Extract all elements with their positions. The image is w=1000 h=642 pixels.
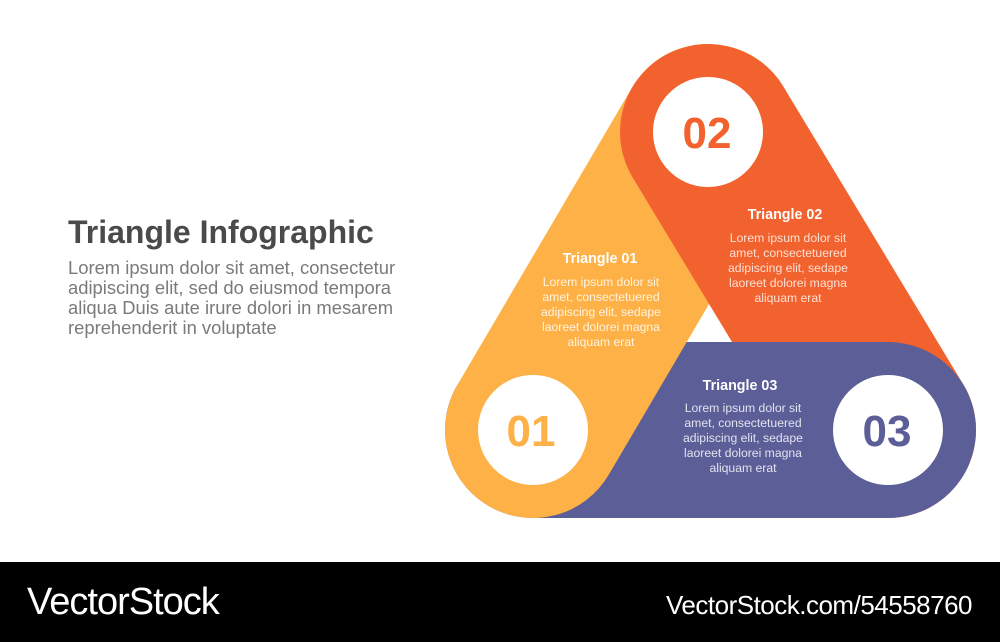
text: triangle 03: adipiscing elit, sedape (683, 431, 803, 445)
text: triangle 01: amet, consectetuered (542, 290, 660, 304)
text: triangle 03: Lorem ipsum dolor sit (685, 401, 802, 415)
text: triangle 03: amet, consectetuered (684, 416, 802, 430)
circle 01 (478, 375, 588, 485)
circle 02: 02 (683, 109, 731, 158)
text: triangle 02: adipiscing elit, sedape (728, 261, 848, 275)
intro text: Lorem ipsum dolor sit amet, consectetur adipiscing elit, sed do eiusmod tempora aliqua Duis aute irure dolori in mesarem reprehenderit in voluptate (68, 257, 395, 338)
circle 03: 03 (863, 407, 911, 456)
text: triangle 03: Triangle 03 (703, 378, 777, 394)
text: triangle 03: laoreet dolorei magna (684, 446, 802, 460)
circle 01: 01 (507, 407, 555, 456)
text: triangle 01: Triangle 01 (563, 251, 637, 267)
text: triangle 01: adipiscing elit, sedape (541, 305, 661, 319)
purple capsule (533, 342, 888, 518)
text: triangle 02: Triangle 02 (748, 207, 822, 223)
text: triangle 02: Lorem ipsum dolor sit (730, 231, 847, 245)
text: triangle 01: aliquam erat (567, 335, 635, 349)
text: triangle 01 (541, 251, 661, 349)
yellow capsule (533, 132, 708, 430)
footer url: VectorStock.com/54558760 (666, 590, 972, 620)
purple capsule overlap (732, 342, 976, 518)
red capsule (708, 132, 888, 430)
circle 02 (653, 77, 763, 187)
text: triangle 02: laoreet dolorei magna (729, 276, 847, 290)
triangle diagram (445, 44, 976, 518)
text: triangle 03: aliquam erat (709, 461, 777, 475)
text: triangle 02 (728, 207, 848, 305)
text: triangle 02: aliquam erat (754, 291, 822, 305)
text: triangle 01: Lorem ipsum dolor sit (543, 275, 660, 289)
text: triangle 03 (683, 378, 803, 475)
title: Triangle Infographic (68, 214, 374, 250)
footer bar (0, 562, 1000, 642)
text: triangle 02: amet, consectetuered (729, 246, 847, 260)
footer logo: VectorStock (27, 581, 219, 623)
text: triangle 01: laoreet dolorei magna (542, 320, 660, 334)
circle 03 (833, 375, 943, 485)
